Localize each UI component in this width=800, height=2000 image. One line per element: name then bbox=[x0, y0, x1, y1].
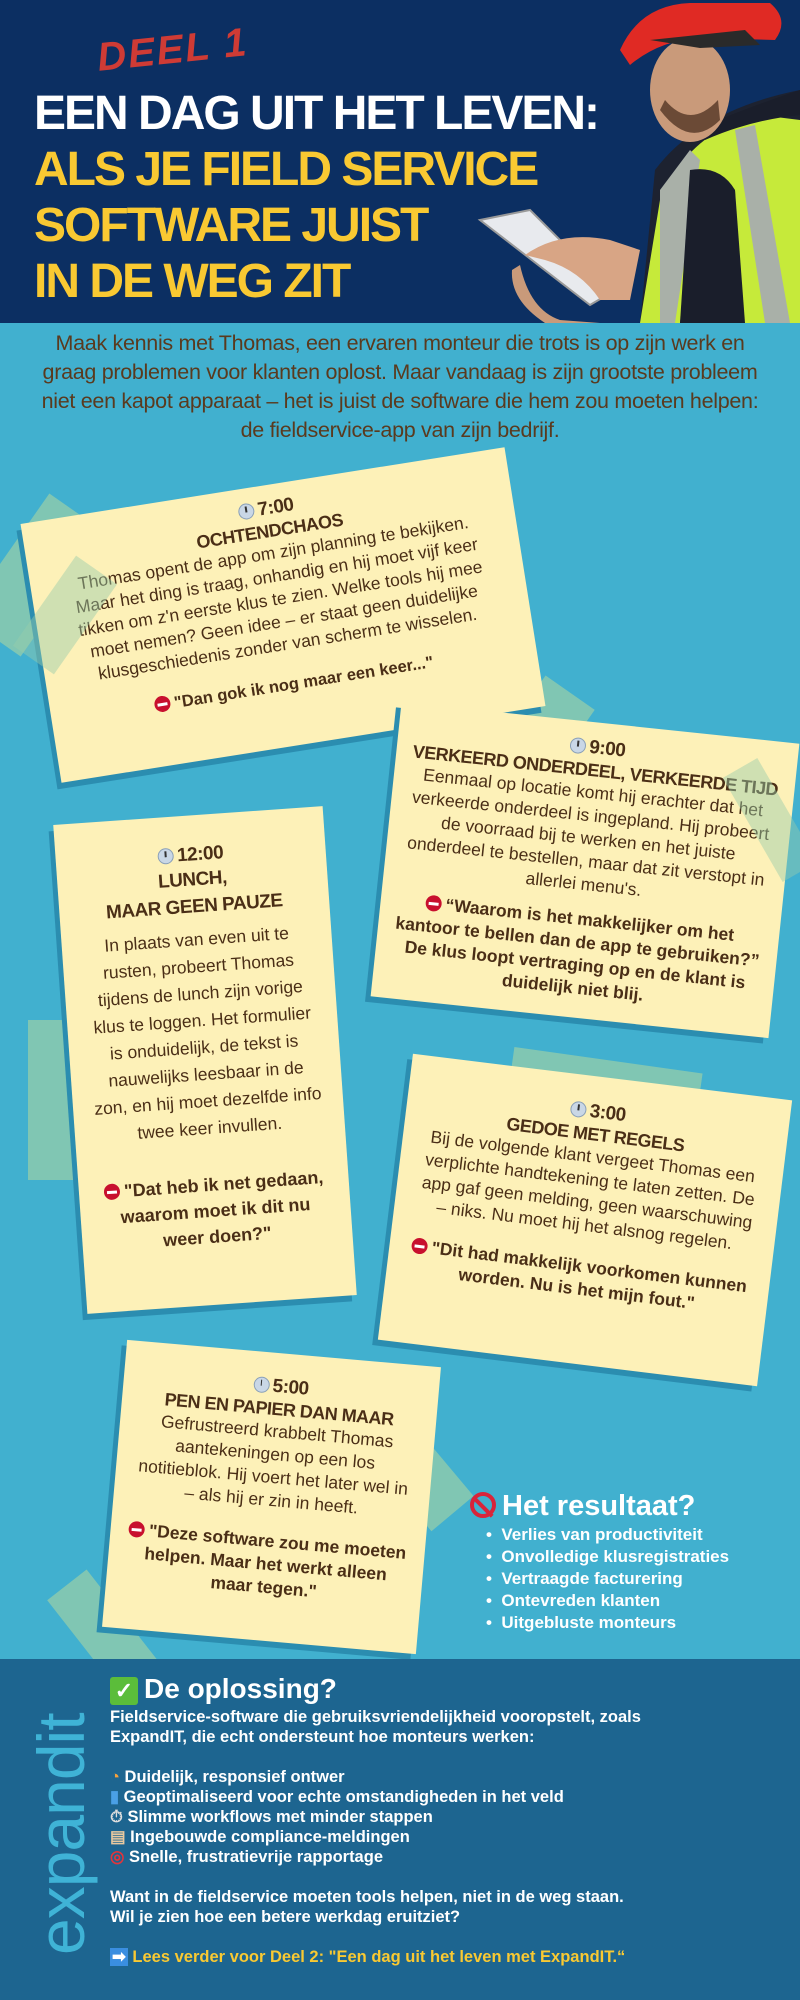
solution text: ⏱ Slimme workflows met minder stappen bbox=[110, 1808, 433, 1826]
note: 12:00 lunch: 12:00 bbox=[176, 842, 224, 866]
result list: • Ontevreden klanten bbox=[486, 1591, 660, 1610]
solution text: ◎ Snelle, frustratievrije rapportage bbox=[110, 1848, 383, 1866]
note: 3:00 regels: 3:00 bbox=[588, 1101, 627, 1126]
note: 9:00 verkeerd onderdeel: “Waarom is het makkelijker om het kantoor te bellen dan de app te gebruiken?” De klus loopt vertraging op en de klant is duidelijk niet blij. bbox=[395, 895, 760, 1005]
result list: • Onvolledige klusregistraties bbox=[486, 1547, 729, 1566]
title: ALS JE FIELD SERVICE bbox=[34, 143, 537, 196]
note: 5:00 pen en papier: 5:00 bbox=[272, 1376, 309, 1400]
note: 9:00 verkeerd onderdeel: VERKEERD ONDERDEEL, VERKEERDE TIJD bbox=[412, 741, 779, 800]
note: 5:00 pen en papier: PEN EN PAPIER DAN MAAR bbox=[164, 1389, 394, 1429]
tape overlays on notes bbox=[13, 556, 117, 674]
solution text: ExpandIT, die echt ondersteunt hoe monteurs werken: bbox=[110, 1728, 534, 1746]
note: 7:00 ochtendchaos: 7:00 bbox=[256, 494, 295, 521]
solution text: Wil je zien hoe een betere werkdag eruitziet? bbox=[110, 1908, 460, 1926]
solution text: ◔ Duidelijk, responsief ontwer bbox=[110, 1768, 345, 1786]
title: EEN DAG UIT HET LEVEN: bbox=[34, 87, 598, 140]
note: 9:00 verkeerd onderdeel bbox=[371, 702, 799, 1038]
note: 3:00 regels: Bij de volgende klant vergeet Thomas een verplichte handtekening te laten zetten. De app gaf geen melding, geen waarschuwing – niks. Nu moet hij het alsnog regelen. bbox=[421, 1127, 756, 1253]
result heading: Het resultaat? bbox=[502, 1490, 695, 1522]
note: 12:00 lunch bbox=[53, 806, 357, 1314]
note: 12:00 lunch: LUNCH, bbox=[157, 867, 227, 893]
footer panel bbox=[0, 1659, 800, 2000]
note: 3:00 regels: "Dit had makkelijk voorkomen kunnen worden. Nu is het mijn fout." bbox=[431, 1238, 748, 1313]
note: 5:00 pen en papier: "Deze software zou me moeten helpen. Maar het werkt alleen maar tegen." bbox=[144, 1520, 407, 1601]
label: Deel 1: DEEL 1 bbox=[95, 20, 250, 80]
note: 7:00 ochtendchaos: OCHTENDCHAOS bbox=[195, 510, 344, 553]
note: 7:00 ochtendchaos: "Dan gok ik nog maar een keer..." bbox=[173, 653, 435, 712]
logo: expandit: expandit bbox=[24, 1713, 98, 1955]
note: 3:00 regels bbox=[378, 1054, 792, 1386]
note: 7:00 ochtendchaos: Thomas opent de app om zijn planning te bekijken. Maar het ding is traag, onhandig en hij moet vijf keer tikken om z'n eerste klus te zien. Welke tools hij mee moet nemen? Geen idee – er staat geen duidelijke klusgeschiedenis zonder van scherm te wisselen. bbox=[74, 512, 484, 683]
note: 3:00 regels: GEDOE MET REGELS bbox=[505, 1114, 686, 1155]
note: 7:00 ochtendchaos bbox=[21, 447, 545, 783]
note: 12:00 lunch: "Dat heb ik net gedaan, waarom moet ik dit nu weer doen?" bbox=[120, 1167, 324, 1250]
solution heading: ✓ bbox=[115, 1678, 133, 1703]
solution text: Fieldservice-software die gebruiksvriendelijkheid vooropstelt, zoals bbox=[110, 1708, 641, 1726]
result block bbox=[470, 1490, 729, 1632]
title: IN DE WEG ZIT bbox=[34, 255, 349, 308]
solution heading: De oplossing? bbox=[144, 1673, 337, 1704]
note: 5:00 pen en papier: Gefrustreerd krabbelt Thomas aantekeningen op een los notitieblok. Hij voert het later wel in – als hij er zin in heeft. bbox=[138, 1411, 409, 1518]
photo: technician with tablet bbox=[478, 3, 800, 323]
title: SOFTWARE JUIST bbox=[34, 199, 427, 252]
tape decorations bbox=[0, 493, 107, 657]
result list: • Uitgebluste monteurs bbox=[486, 1613, 676, 1632]
note: 12:00 lunch: MAAR GEEN PAUZE bbox=[105, 890, 283, 924]
solution text: ➡ Lees verder voor Deel 2: "Een dag uit het leven met ExpandIT.“ bbox=[112, 1948, 625, 1966]
solution text bbox=[110, 1708, 641, 1966]
solution text: ▤ Ingebouwde compliance-meldingen bbox=[110, 1828, 410, 1846]
result list bbox=[486, 1525, 729, 1632]
note: 5:00 pen en papier bbox=[102, 1340, 441, 1654]
intro text: Maak kennis met Thomas, een ervaren monteur die trots is op zijn werk en graag problemen voor klanten oplost. Maar vandaag is zijn grootste probleem niet een kapot apparaat – het is juist de software die hem zou moeten helpen: de fieldservice-app van zijn bedrijf. bbox=[42, 331, 758, 442]
header background bbox=[0, 0, 800, 323]
result list: • Vertraagde facturering bbox=[486, 1569, 683, 1588]
result list: • Verlies van productiviteit bbox=[486, 1525, 703, 1544]
title bbox=[34, 87, 598, 308]
note: 12:00 lunch: In plaats van even uit te rusten, probeert Thomas tijdens de lunch zijn vorige klus te loggen. Het formulier is onduidelijk, de tekst is nauwelijks leesbaar in de zon, en hij moet dezelfde info twee keer invullen. bbox=[93, 923, 322, 1143]
note: 9:00 verkeerd onderdeel: 9:00 bbox=[588, 737, 626, 761]
solution text: ▮ Geoptimaliseerd voor echte omstandigheden in het veld bbox=[110, 1788, 564, 1806]
solution text: Want in de fieldservice moeten tools helpen, niet in de weg staan. bbox=[110, 1888, 624, 1906]
note: 9:00 verkeerd onderdeel: Eenmaal op locatie komt hij erachter dat het verkeerde onderdeel is ingepland. Hij probeert de voorraad bij te werken en het juiste onderdeel te bestellen, maar dat zit verstopt in allerlei menu's. bbox=[406, 765, 770, 900]
